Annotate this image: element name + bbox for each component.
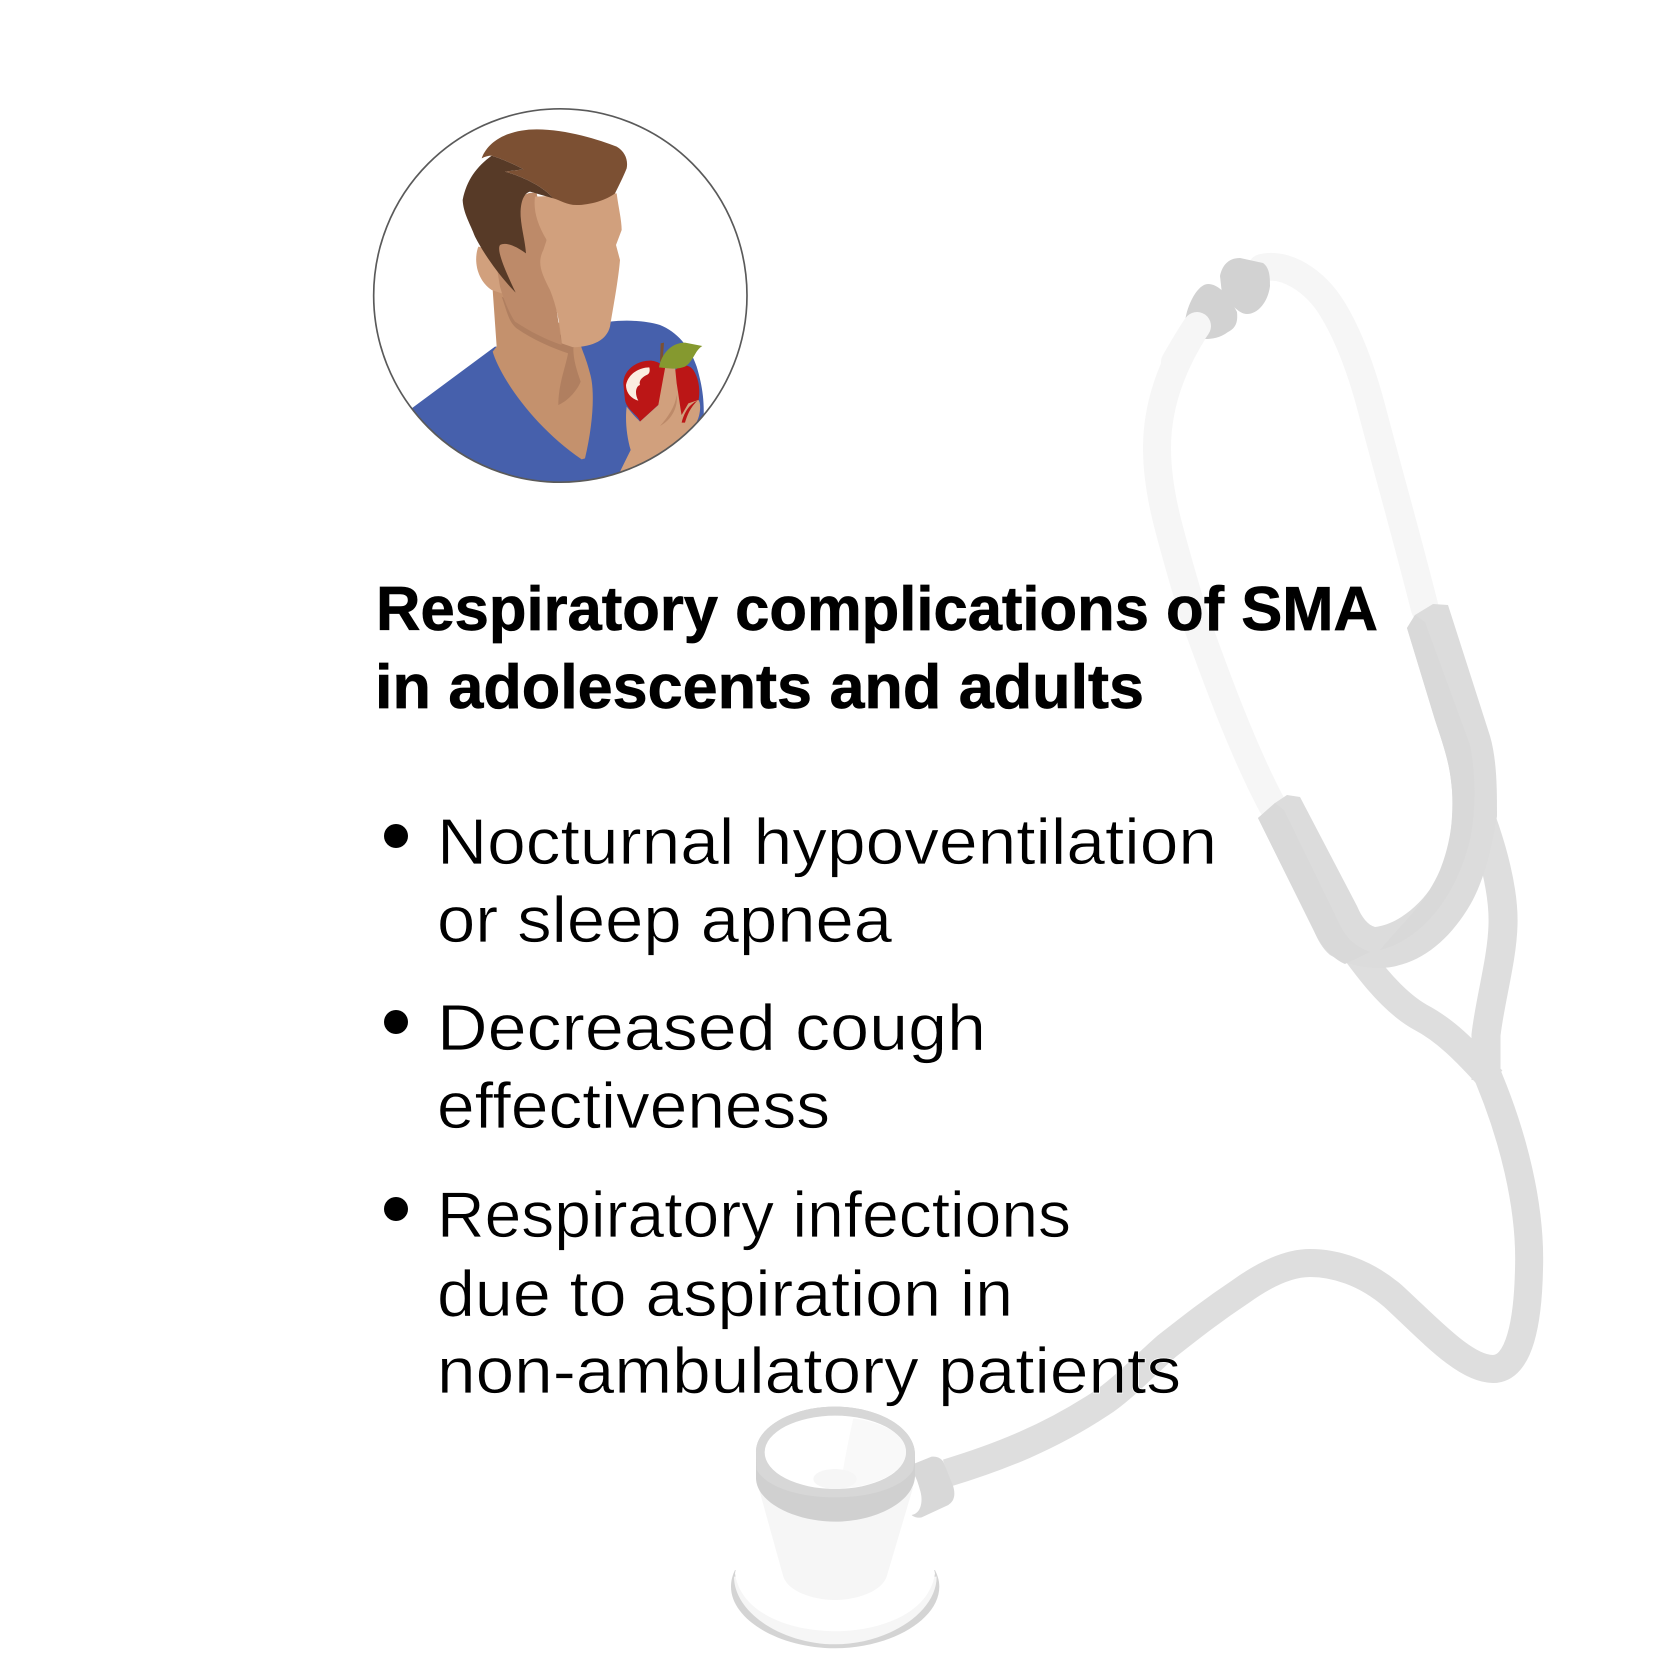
- opening highlight: [840, 1418, 906, 1488]
- leaf: [659, 343, 702, 369]
- bullet: decreased cough: Decreased cough: [437, 991, 986, 1064]
- bullet: respiratory infections: due to aspiration in: [437, 1257, 1013, 1330]
- finger shadows: [660, 395, 677, 426]
- cone: [758, 1487, 913, 1600]
- diaphragm rim: [731, 1570, 939, 1648]
- heading: [375, 575, 1378, 722]
- tube connector: [912, 1457, 954, 1518]
- front of face: [535, 193, 622, 347]
- shirt: [412, 320, 704, 482]
- right ear tube: [1262, 267, 1425, 609]
- main tube: [947, 1058, 1529, 1473]
- chest piece: [731, 1407, 954, 1648]
- left ear tube: [1157, 326, 1272, 805]
- apple: [623, 361, 699, 423]
- heading: Respiratory complications of SMA: [376, 575, 1378, 644]
- side of face: [493, 193, 562, 345]
- binaural metal tube: [1258, 604, 1497, 968]
- bullet: respiratory infections: Respiratory infections: [437, 1178, 1071, 1251]
- bullet: nocturnal hypoventilation: Nocturnal hypoventilation: [437, 805, 1217, 878]
- bullet: decreased cough: effectiveness: [437, 1069, 830, 1142]
- apple bite: [626, 367, 650, 401]
- left earpiece: [1185, 284, 1237, 339]
- bullet: respiratory infections: non-ambulatory patients: [437, 1334, 1181, 1407]
- bullet: decreased cough: [384, 991, 986, 1142]
- left ear tube tip: [1175, 326, 1197, 362]
- diaphragm band: [734, 1577, 937, 1644]
- dark hair: [463, 156, 553, 293]
- illustration: man eating an apple: [374, 109, 747, 507]
- bullet: nocturnal hypoventilation: or sleep apnea: [437, 883, 893, 956]
- bullet: respiratory infections: [384, 1178, 1181, 1407]
- neck: [493, 290, 593, 459]
- light hair: [482, 129, 627, 205]
- metal tube shading: [1258, 615, 1474, 964]
- illustration: stethoscope: [731, 258, 1529, 1648]
- bullet list: [384, 805, 1217, 1407]
- heading: in adolescents and adults: [375, 653, 1144, 722]
- bullet: nocturnal hypoventilation: [384, 805, 1217, 956]
- neck shadow: [502, 297, 575, 353]
- rim: [756, 1407, 915, 1522]
- ear: [476, 247, 503, 293]
- apple stem: [660, 343, 664, 362]
- fork left branch: [1340, 930, 1492, 1080]
- right earpiece: [1220, 258, 1270, 314]
- opening: [765, 1416, 906, 1489]
- circle outline: [374, 109, 747, 482]
- fork right branch: [1470, 790, 1503, 1080]
- hand: [620, 368, 700, 472]
- diaphragm top: [735, 1527, 935, 1631]
